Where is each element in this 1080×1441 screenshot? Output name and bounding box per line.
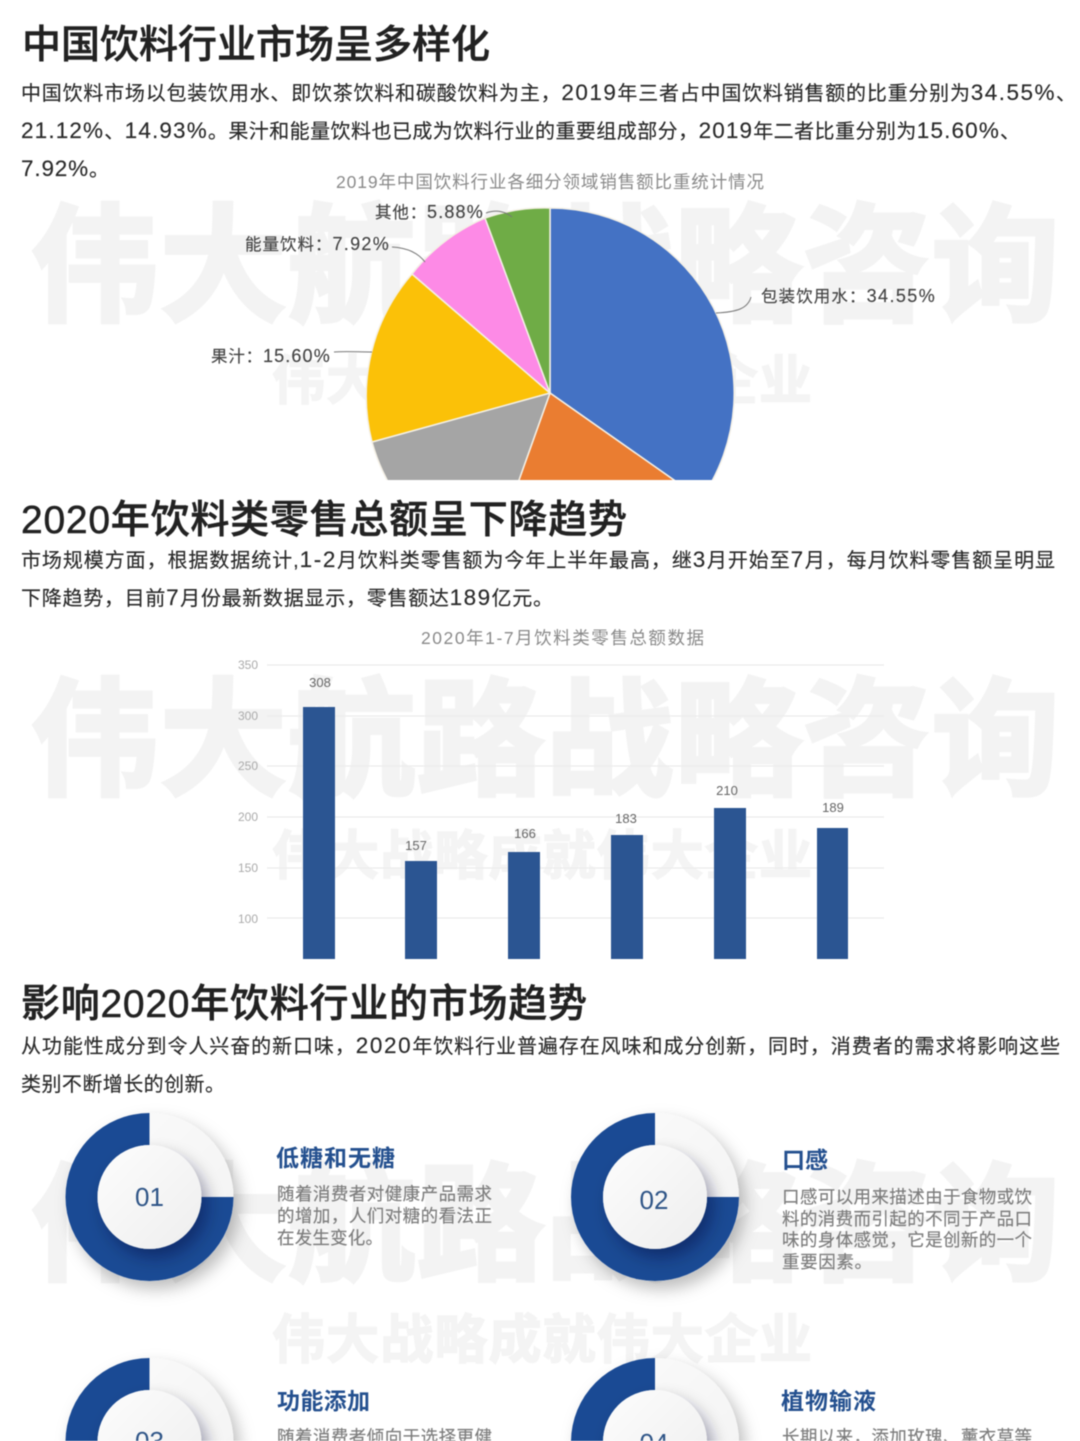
pie labels: 包装饮用水：34.55% bbox=[761, 286, 935, 306]
y axis labels bbox=[238, 658, 258, 926]
text block: retail decline: 市场规模方面，根据数据统计,1-2月饮料类零售额为今年上半年最高，继3月开始至7月，每月饮料零售额呈明显 bbox=[21, 547, 1055, 572]
bar values: 183 bbox=[615, 811, 637, 826]
item description: 在发生变化。 bbox=[277, 1228, 383, 1248]
item description: 随着消费者对健康产品需求 bbox=[277, 1184, 492, 1204]
pie labels: 其他：5.88% bbox=[375, 202, 483, 222]
y axis labels: 200 bbox=[238, 810, 258, 824]
y axis labels: 150 bbox=[238, 861, 258, 875]
item description bbox=[277, 1184, 492, 1248]
heading: market trends: 影响2020年饮料行业的市场趋势 bbox=[21, 983, 587, 1026]
item title: 低糖和无糖 bbox=[276, 1145, 395, 1171]
item title: 功能添加 bbox=[277, 1388, 370, 1414]
item title: 植物输液 bbox=[781, 1388, 876, 1414]
watermark: company name repeated: 伟大战略成就伟大企业 bbox=[272, 352, 812, 411]
watermark: company name repeated: 伟大战略成就伟大企业 bbox=[272, 1311, 812, 1370]
text block: market intro: 7.92%。 bbox=[21, 156, 109, 181]
chart title: 2019年中国饮料行业各细分领域销售额比重统计情况 bbox=[336, 172, 764, 192]
icon: donut 02: 02 bbox=[640, 1185, 668, 1215]
heading: market diversity: 中国饮料行业市场呈多样化 bbox=[22, 24, 490, 67]
watermark: company name repeated bbox=[31, 196, 1059, 1370]
bar values: 189 bbox=[822, 800, 844, 815]
bar values: 308 bbox=[309, 675, 331, 690]
y axis labels: 300 bbox=[238, 709, 258, 723]
item description: 料的消费而引起的不同于产品口 bbox=[782, 1209, 1032, 1229]
watermark: company name repeated: 伟大航路战略咨询 bbox=[31, 670, 1059, 812]
text block: market intro: 中国饮料市场以包装饮用水、即饮茶饮料和碳酸饮料为主，2019年三者占中国饮料销售额的比重分别为34.55%、 bbox=[21, 80, 1076, 105]
item description bbox=[782, 1187, 1032, 1272]
text block: retail decline: 下降趋势，目前7月份最新数据显示，零售额达189亿元。 bbox=[21, 585, 553, 610]
pie chart: 2019 sales share bbox=[211, 172, 935, 481]
bar chart: 2020 Jan-Jul retail bbox=[238, 628, 884, 959]
watermark: company name repeated: 伟大战略成就伟大企业 bbox=[272, 827, 812, 886]
icon: donut 03 bbox=[66, 1358, 234, 1441]
chart title: 2020年1-7月饮料类零售总额数据 bbox=[421, 628, 704, 648]
pie labels: 果汁：15.60% bbox=[211, 346, 330, 366]
bars bbox=[303, 707, 848, 959]
panel: trend 03 bbox=[66, 1358, 492, 1441]
item description: 口感可以用来描述由于食物或饮 bbox=[782, 1187, 1032, 1207]
icon: donut 02 bbox=[571, 1113, 739, 1281]
bar values bbox=[309, 675, 844, 853]
pie leader lines bbox=[334, 211, 751, 352]
watermark: company name repeated: 伟大航路战略咨询 bbox=[31, 1155, 1059, 1297]
y axis labels: 250 bbox=[238, 759, 258, 773]
heading: retail decline: 2020年饮料类零售总额呈下降趋势 bbox=[21, 499, 627, 542]
text block: market trends: 从功能性成分到令人兴奋的新口味，2020年饮料行业普遍存在风味和成分创新，同时，消费者的需求将影响这些 bbox=[21, 1033, 1060, 1058]
item title: 口感 bbox=[782, 1147, 828, 1173]
bar values: 166 bbox=[514, 826, 536, 841]
panel: trend 02 bbox=[571, 1113, 1032, 1281]
item description: 味的身体感觉，它是创新的一个 bbox=[782, 1230, 1032, 1250]
pie labels bbox=[211, 202, 935, 366]
bar values: 157 bbox=[405, 838, 427, 853]
watermark: company name repeated: 伟大航路战略咨询 bbox=[31, 196, 1059, 338]
text block: market trends: 类别不断增长的创新。 bbox=[21, 1073, 225, 1096]
icon: donut 04 bbox=[571, 1358, 739, 1441]
text block: market trends bbox=[21, 1033, 1060, 1096]
y axis labels: 350 bbox=[238, 658, 258, 672]
item description: 重要因素。 bbox=[782, 1252, 872, 1272]
pie labels: 能量饮料：7.92% bbox=[245, 234, 389, 254]
item description: 的增加，人们对糖的看法正 bbox=[277, 1206, 492, 1226]
text block: market intro bbox=[21, 80, 1076, 181]
y axis labels: 100 bbox=[238, 912, 258, 926]
icon: donut 01: 01 bbox=[135, 1182, 164, 1212]
panel: trend 04 bbox=[571, 1358, 1032, 1441]
text block: retail decline bbox=[21, 547, 1055, 610]
panel: trend 01 bbox=[66, 1113, 492, 1281]
bar values: 210 bbox=[716, 783, 738, 798]
pie slices bbox=[366, 207, 735, 481]
text block: market intro: 21.12%、14.93%。果汁和能量饮料也已成为饮料行业的重要组成部分，2019年二者比重分别为15.60%、 bbox=[21, 118, 1020, 143]
icon: donut 01 bbox=[66, 1113, 234, 1281]
